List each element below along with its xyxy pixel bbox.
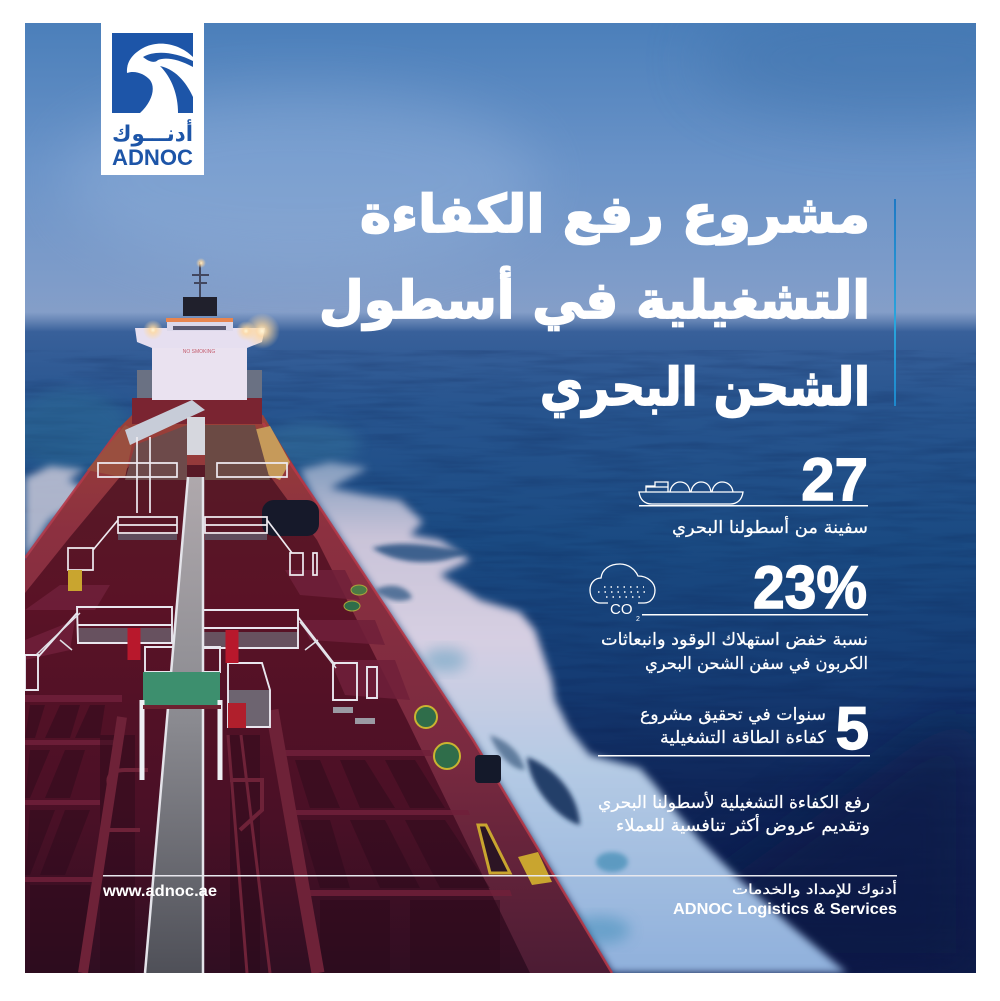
gangway <box>142 477 221 973</box>
logo latin name: ADNOC <box>112 145 193 170</box>
logo falcon mark <box>112 33 193 113</box>
closing statement: رفع الكفاءة التشغيلية لأسطولنا البحري <box>598 792 870 813</box>
title: مشروع رفع الكفاءة <box>360 185 870 245</box>
footer rule <box>103 875 897 876</box>
number 23%: 23% <box>753 554 867 621</box>
caption 23%: نسبة خفض استهلاك الوقود وانبعاثات <box>601 630 868 650</box>
ship hull <box>25 415 612 973</box>
footer website: www.adnoc.ae <box>102 883 217 900</box>
icon: CO2 cloud: CO <box>610 601 632 618</box>
title: الشحن البحري <box>540 358 870 418</box>
logo plate <box>101 23 204 175</box>
hull rail <box>25 423 612 973</box>
midship equipment <box>68 400 319 591</box>
title accent bar <box>894 199 896 406</box>
footer company names: أدنوك للإمداد والخدمات <box>732 880 897 898</box>
icon: CO2 cloud: 2 <box>636 616 640 623</box>
closing statement: وتقديم عروض أكثر تنافسية للعملاء <box>616 814 870 836</box>
icon: gas carrier ship <box>639 482 743 504</box>
superstructure <box>132 258 280 424</box>
stat: 5 years <box>598 695 870 762</box>
sea wake right <box>300 462 847 973</box>
icon: CO2 cloud <box>590 564 655 623</box>
superstructure: NO SMOKING <box>183 349 215 355</box>
stat: 23 percent: الكربون في سفن الشحن البحري <box>645 654 868 674</box>
caption 5: سنوات في تحقيق مشروع <box>640 705 826 725</box>
stat: 23 percent <box>590 554 868 674</box>
stat: 5 years: كفاءة الطاقة التشغيلية <box>660 728 827 748</box>
logo arabic name: أدنـــوك <box>112 118 193 147</box>
footer company names: ADNOC Logistics & Services <box>673 901 897 918</box>
closing statement <box>598 792 870 836</box>
title: التشغيلية في أسطول <box>319 266 870 331</box>
sea foam left <box>25 466 85 560</box>
deck walkways and railings <box>25 607 377 728</box>
title <box>319 185 870 418</box>
deck markings <box>344 585 552 885</box>
ship deck <box>25 465 530 973</box>
number 5: 5 <box>836 695 869 762</box>
caption 27: سفينة من أسطولنا البحري <box>672 516 868 538</box>
number 27: 27 <box>801 446 868 513</box>
stat: 27 ships <box>639 446 868 538</box>
footer company names <box>673 880 897 918</box>
